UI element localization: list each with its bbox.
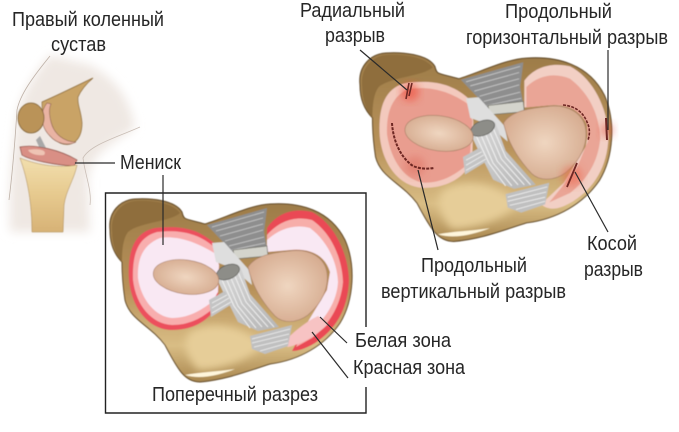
label: meniscus: Мениск: [120, 152, 181, 174]
label: longitudinal vertical tear: Продольный: [421, 255, 527, 277]
leader lines: [75, 50, 608, 378]
label: radial tear: разрыв: [325, 25, 385, 47]
label: white zone: Белая зона: [355, 330, 452, 352]
label: oblique tear: разрыв: [584, 259, 643, 281]
cross section frame: [106, 193, 366, 413]
label: oblique tear: [584, 233, 643, 281]
label: radial tear: Радиальный: [300, 0, 405, 22]
caption: cross section: Поперечный разрез: [152, 384, 318, 406]
icon: tear marks: [392, 83, 614, 187]
illustration: meniscus tears plateau: [360, 53, 612, 241]
heading: right knee joint: [12, 9, 164, 56]
icon: right knee joint illustration: [9, 55, 140, 232]
label: red zone: Красная зона: [353, 357, 466, 379]
heading: right knee joint: Правый коленный: [12, 9, 164, 31]
label: oblique tear: Косой: [587, 233, 637, 255]
label: longitudinal horizontal tear: [466, 1, 668, 49]
label: radial tear: [300, 0, 405, 47]
illustration: cross section plateau: [110, 199, 352, 382]
label: longitudinal horizontal tear: Продольный: [505, 1, 612, 23]
heading: right knee joint: сустав: [51, 34, 106, 56]
label: longitudinal vertical tear: [381, 255, 566, 303]
label: longitudinal vertical tear: вертикальный разрыв: [381, 281, 566, 303]
